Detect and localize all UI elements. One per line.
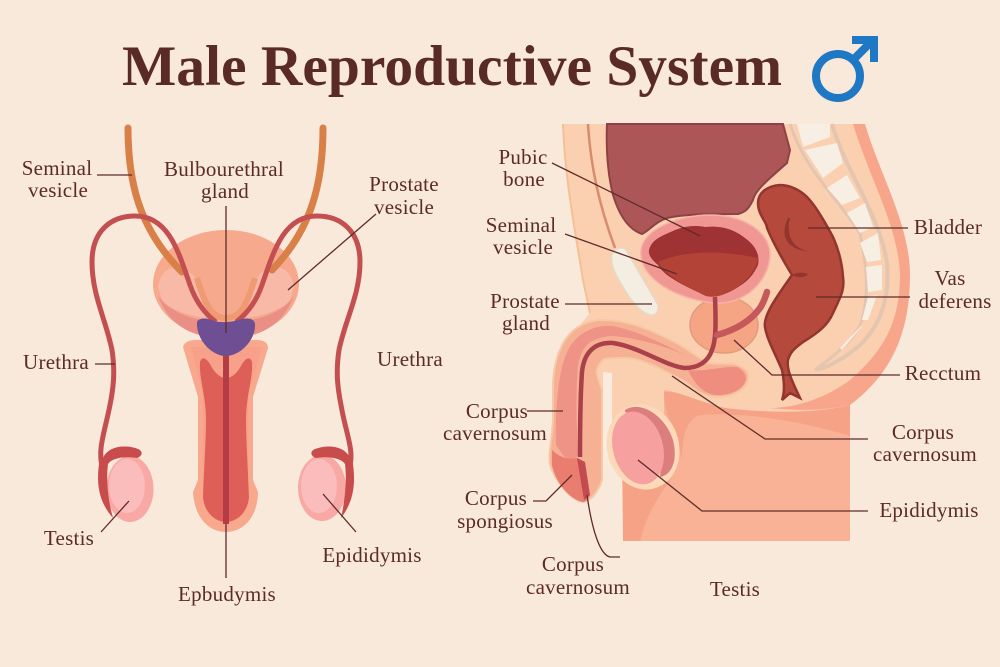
seminal vesicles (158, 267, 206, 318)
labels: right: Prostate (490, 289, 560, 313)
pelvic base (622, 390, 850, 541)
labels: right: vesicle (493, 235, 553, 259)
labels: right: gland (502, 311, 550, 335)
labels: right (443, 145, 992, 601)
labels: left: vesicle (28, 178, 88, 202)
prostate (690, 297, 758, 353)
labels: right: Vas (934, 266, 966, 290)
urethra tip (577, 458, 590, 500)
labels: left: Urethra (377, 347, 443, 371)
pubic bone (611, 248, 658, 315)
labels: left: Bulbourethral (164, 157, 284, 181)
labels: right: Corpus (466, 399, 528, 423)
urethra (580, 297, 716, 457)
labels: left: Epididymis (322, 543, 422, 567)
labels: right: spongiosus (457, 509, 553, 533)
labels: left: vesicle (374, 195, 434, 219)
labels: left: gland (201, 179, 249, 203)
duct to prostate (717, 292, 767, 335)
labels: left (22, 156, 443, 606)
labels: right: Testis (710, 577, 760, 601)
labels: right: Corpus (892, 420, 954, 444)
bladder outer (153, 230, 299, 338)
penis body side (549, 320, 748, 502)
corpus bulb (688, 367, 746, 395)
labels: right: Epididymis (879, 498, 979, 522)
glans (552, 450, 590, 502)
title: Male Reproductive System (122, 35, 782, 98)
labels: right: cavernosum (443, 421, 547, 445)
large upper organ (607, 124, 790, 234)
testes (106, 456, 154, 522)
corpus band (556, 326, 685, 460)
side view diagram (549, 124, 910, 541)
spine (790, 124, 866, 370)
purple gland (197, 318, 255, 356)
gap between shaft and scrotum (603, 372, 612, 470)
spine bones (797, 124, 882, 350)
labels: right: bone (503, 167, 545, 191)
front view diagram (92, 128, 360, 532)
labels: right: cavernosum (873, 442, 977, 466)
labels: left: Epbudymis (178, 582, 276, 606)
labels: right: Corpus (465, 486, 527, 510)
labels: left: Urethra (23, 350, 89, 374)
labels: left: Testis (44, 526, 94, 550)
leader lines (95, 163, 910, 578)
skin body (557, 124, 910, 450)
rectum (758, 185, 843, 400)
scrotum and testis (597, 396, 689, 498)
labels: left: Prostate (369, 172, 439, 196)
labels: right: Pubic (498, 145, 548, 169)
labels: right: Bladder (914, 215, 982, 239)
red ducts (92, 216, 216, 470)
labels: left: Seminal (22, 156, 92, 180)
penis (183, 340, 268, 532)
labels: right: cavernosum (526, 575, 630, 599)
back skin band (770, 124, 910, 410)
labels: right: Recctum (905, 361, 981, 385)
labels: right: Seminal (486, 213, 556, 237)
labels: right: deferens (918, 289, 992, 313)
icon: male symbol (816, 40, 874, 98)
abdominal wall line (588, 124, 615, 248)
bladder inner (649, 226, 758, 296)
orange tubes (128, 128, 182, 272)
bladder (641, 215, 770, 303)
labels: right: Corpus (542, 552, 604, 576)
front skin outline (563, 124, 590, 313)
